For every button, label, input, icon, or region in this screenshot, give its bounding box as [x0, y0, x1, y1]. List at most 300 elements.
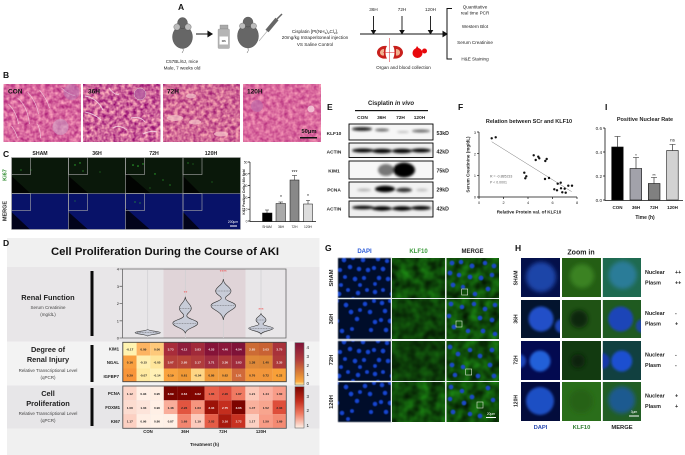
expression scores: Plasm [645, 404, 661, 410]
axis tick labels: 4 [117, 266, 120, 272]
heatmap: proliferation markers: 1.08 [127, 406, 133, 410]
heatmap: proliferation markers: 1.87 [236, 392, 242, 396]
regression line [492, 142, 572, 192]
heatmap column labels: 72H [219, 429, 227, 434]
row labels: 36H [329, 314, 335, 324]
expression scores: ++ [675, 270, 681, 276]
column headers: MERGE [461, 249, 484, 255]
row band: cell proliferation [7, 386, 320, 428]
heading: renal function [21, 293, 75, 317]
row labels: SHAM [329, 269, 335, 287]
heading: renal function: Renal Function [21, 293, 75, 302]
heatmap: renal injury markers: 4.54 [236, 348, 242, 352]
bar labels: 36H [278, 225, 285, 229]
bar labels [262, 225, 313, 229]
heatmap row labels: PCNA [108, 391, 120, 396]
chart tick labels: 0.2 [596, 174, 602, 179]
expression scores [645, 270, 681, 410]
heatmap: renal injury markers: 2.85 [249, 348, 255, 352]
blot: ACTIN [349, 143, 433, 158]
blot: KIM1 [349, 161, 433, 179]
heading: renal injury: Degree of [31, 345, 66, 354]
readout labels: H&E Staining [461, 56, 489, 62]
injection text: 20mg/kg Intraperitoneal injection [282, 35, 349, 40]
readout labels: Quantitative [463, 4, 488, 10]
expression scores: Nuclear [645, 352, 666, 358]
significance marks: * [635, 153, 637, 158]
scatter tick labels: 3 [474, 131, 476, 135]
row labels [514, 271, 520, 407]
scale bar 20 micrometre [486, 412, 496, 418]
icon: syringe [259, 14, 282, 41]
axis tick labels: 0 [117, 336, 120, 340]
scatter tick labels [474, 131, 578, 205]
heatmap: proliferation markers: 1.47 [249, 406, 255, 410]
heatmap: proliferation markers [123, 386, 286, 428]
violins [135, 279, 273, 336]
expression scores: - [675, 352, 677, 358]
axis tick labels: 2 [117, 301, 120, 306]
column headers: KLF10 [409, 249, 428, 255]
chart axes [603, 128, 683, 200]
chart tick labels: 0.6 [596, 126, 602, 131]
panel H: zoomed nuclei [512, 243, 681, 431]
heatmap: proliferation markers: 0.93 [140, 392, 147, 396]
icon: mouse [172, 18, 192, 53]
heatmap row labels: KIM1 [109, 346, 120, 352]
arrow: mouse to vial [196, 32, 212, 36]
heading: cell proliferation: Proliferation [26, 399, 70, 408]
bracket [447, 8, 452, 59]
heatmap: renal injury markers: -0.05 [153, 360, 161, 364]
heatmap: proliferation markers: 0.95 [154, 392, 160, 396]
scatter tick labels: 1 [474, 174, 476, 178]
heatmap: proliferation markers: 0.86 [154, 420, 160, 424]
heatmap: renal injury markers: 0.22 [276, 374, 283, 378]
bar chart tick labels: 50 [244, 160, 248, 164]
heatmap: proliferation markers: 2.26 [181, 406, 187, 410]
panel letter G: G [325, 243, 332, 253]
scatter tick labels: 2 [474, 152, 476, 156]
zoom boxes [456, 289, 483, 408]
label 36H: 36H [88, 88, 100, 96]
lane labels: 36H [377, 115, 386, 121]
heading: renal function: (mg/dL) [40, 312, 56, 317]
heatmap column labels: CON [143, 429, 153, 434]
panel F: correlation scatter [458, 102, 578, 214]
heatmap: proliferation markers: 2.03 [208, 420, 215, 424]
correlation statistics: R = -0.885233 [490, 174, 512, 178]
heatmap: renal injury markers: -0.14 [153, 374, 161, 378]
readout labels: real time PCR [461, 10, 490, 16]
scatter axis titles [466, 136, 562, 214]
timepoint labels [369, 7, 436, 12]
molecular weights: 42kD [436, 206, 449, 212]
scale bar 200 micrometre: 200μm [228, 220, 238, 224]
heatmap: renal injury markers: 3.73 [168, 348, 174, 352]
panel letter E: E [327, 102, 333, 112]
expression scores: - [675, 363, 677, 369]
heatmap column labels: 120H [256, 429, 266, 434]
heatmap: proliferation markers: 1.69 [181, 420, 187, 424]
heatmap: proliferation markers: 0.96 [140, 420, 147, 424]
heading: cell proliferation [19, 389, 77, 423]
violin plot: serum creatinine [117, 266, 286, 340]
colour scale: proliferation [295, 387, 310, 428]
label 72H: 72H [167, 88, 179, 96]
significance marks [280, 170, 309, 201]
scale bar 200 micrometre [228, 220, 238, 226]
heatmap: renal injury markers: 4.12 [181, 348, 187, 352]
heatmap row labels: KI67 [111, 419, 121, 424]
scatter title: Relation between SCr and KLF10 [486, 119, 572, 125]
panel B: H&E histology [3, 70, 321, 142]
heatmap: renal injury markers: 0.76 [249, 374, 255, 378]
row labels: 36H [514, 314, 520, 324]
chart tick labels: 0.4 [596, 150, 602, 155]
scatter axes [477, 132, 577, 199]
mouse strain caption: Male, 7 weeks old [164, 66, 201, 70]
colour scale: proliferation: 1 [306, 423, 310, 428]
scatter points [490, 136, 573, 194]
blot: PCNA [349, 182, 433, 198]
heatmap: proliferation markers: 2.33 [276, 406, 283, 410]
micrograph 72H [163, 84, 240, 142]
violin frame and axis [120, 269, 286, 338]
heading: renal injury: Renal Injury [27, 355, 70, 364]
scatter tick labels: 6 [551, 201, 554, 205]
significance marks [635, 138, 676, 178]
significance marks: * [280, 195, 282, 201]
bar labels [612, 205, 678, 210]
significance stars: ** [184, 290, 187, 295]
zoom heading: Zoom in [567, 250, 595, 256]
heading: renal injury: (qPCR) [40, 375, 56, 380]
heatmap: proliferation markers: 1.63 [195, 406, 201, 410]
expression scores: + [675, 394, 678, 400]
row labels: 72H [329, 355, 335, 365]
column headers: SHAM [32, 151, 48, 157]
expression scores: Nuclear [645, 394, 666, 400]
expression scores: Nuclear [645, 270, 666, 276]
row band: renal function [7, 267, 320, 342]
lane labels [357, 115, 426, 121]
heatmap: proliferation markers: 1.12 [127, 392, 133, 396]
correlation statistics: P < 0.0001 [490, 180, 507, 184]
readout labels: Serum Creatinine [457, 40, 493, 45]
axis title: Time (h) [635, 215, 655, 221]
axis tick labels [117, 266, 120, 340]
image gutters [338, 258, 499, 422]
heatmap: renal injury markers: 3.36 [222, 360, 228, 364]
DAPI micrographs [338, 258, 391, 422]
row labels: 120H [329, 395, 335, 409]
KLF10 micrographs [392, 258, 445, 422]
scatter axis titles: Relative Protein val. of KLF10 [497, 210, 562, 214]
scale bar 3 micrometre: 3μm [631, 410, 637, 414]
KLF10 staining [562, 258, 601, 421]
injection text [282, 29, 349, 47]
icon: blood [412, 46, 427, 58]
bar labels: 120H [667, 205, 678, 210]
colour scale: renal injury: 3 [306, 354, 310, 359]
timepoint labels: 72H [398, 7, 406, 12]
heatmap: proliferation markers: 2.75 [222, 406, 228, 410]
heading: cell proliferation: (qPCR) [40, 418, 56, 423]
heatmap: proliferation markers: 1.44 [263, 392, 269, 396]
expression scores: Nuclear [645, 311, 666, 317]
expression scores: ++ [675, 280, 681, 286]
injection text: 2 [328, 31, 330, 35]
heatmap: renal injury markers: 0.62 [222, 374, 228, 378]
DAPI nuclei [512, 258, 569, 421]
channel labels: DAPI [534, 425, 548, 431]
panel E: western blots [327, 101, 449, 217]
axis tick labels: 1 [117, 318, 120, 323]
significance marks: *** [292, 170, 297, 176]
heatmap: renal injury markers: -0.17 [126, 348, 134, 352]
blot: KLF10 [349, 124, 433, 140]
row labels: 72H [514, 355, 520, 365]
icon: cisplatin vial [218, 25, 230, 48]
injection text: VS Saline Control [297, 42, 333, 47]
scatter axis titles: Serum Creatinine (mg/dL) [466, 136, 470, 193]
column headers: 120H [205, 151, 217, 157]
heading rule [355, 110, 428, 111]
heatmap: proliferation markers: 0.87 [168, 420, 174, 424]
axis tick labels: 3 [117, 284, 120, 289]
heatmap: proliferation markers: 3.66 [236, 406, 242, 410]
heatmap: renal injury markers: 3.83 [195, 348, 201, 352]
panel G: KLF10 immunofluorescence [325, 243, 499, 422]
heatmap: renal injury markers: 3.17 [195, 360, 201, 364]
heatmap: renal injury markers: 0.19 [168, 374, 174, 378]
scatter tick labels: 0 [478, 201, 480, 205]
column headers [32, 151, 217, 157]
scatter tick labels: 2 [502, 201, 505, 205]
heatmap: proliferation markers: 1.17 [127, 420, 133, 424]
colour scale: renal injury: 1 [306, 372, 310, 377]
injection text: 3 [325, 31, 327, 35]
heatmap: proliferation markers: 1.59 [263, 420, 269, 424]
bar chart axis [248, 162, 316, 222]
bar chart axis title: Ki67 Positive Cells / 40x field [242, 169, 246, 215]
bar chart tick labels: 10 [244, 208, 248, 212]
significance marks: * [307, 194, 309, 200]
lane labels: 120H [414, 115, 426, 121]
protein labels: ACTIN [327, 150, 342, 156]
heatmap: renal injury markers: -0.04 [194, 374, 202, 378]
bar labels: 36H [632, 205, 640, 210]
micrograph CON [4, 84, 82, 142]
icon: kidneys [377, 38, 403, 62]
panel background [7, 238, 320, 455]
scale bar 3 micrometre [629, 410, 639, 416]
heatmap: proliferation markers: 3.34 [208, 406, 215, 410]
title: Cell Proliferation During the Course of AKI [51, 246, 279, 258]
bar labels: 72H [650, 205, 658, 210]
heatmap row labels: IGFBP7 [103, 374, 120, 379]
bar chart: Ki67 positive cells [242, 160, 316, 229]
heatmap row labels: FOXM1 [105, 405, 121, 410]
heading: cell proliferation: Relative Transcriptional Level [19, 411, 77, 416]
row label MERGE: MERGE [2, 201, 8, 221]
heatmap: proliferation markers: 1.52 [263, 406, 269, 410]
significance marks: ** [652, 173, 656, 178]
heatmap: renal injury markers: 0.29 [127, 374, 133, 378]
bar labels: CON [612, 205, 622, 210]
heatmap: proliferation markers: 3.62 [195, 392, 201, 396]
column headers: DAPI [357, 249, 372, 255]
heading: renal function: Serum Creatinine [30, 305, 66, 310]
x axis title: Treatment (h) [190, 442, 220, 447]
mouse strain caption [164, 59, 201, 70]
merged micrographs [446, 258, 499, 422]
blot heading: Cisplatin in vivo [368, 101, 414, 107]
panel letter H: H [515, 243, 521, 253]
readout labels [457, 4, 493, 62]
colour scale: proliferation: 2 [306, 408, 310, 413]
violin quartile lines [137, 291, 272, 333]
timepoint labels: 36H [369, 7, 378, 12]
icon: cisplatin vial: CIS [222, 41, 226, 43]
panel letter A: A [178, 2, 184, 12]
protein labels: PCNA [327, 188, 341, 194]
expression scores: + [675, 322, 678, 328]
lane labels: CON [357, 115, 368, 121]
heatmap: renal injury markers: 0.86 [208, 374, 215, 378]
heatmap: proliferation markers: 1.69 [276, 420, 283, 424]
molecular weights: 42kD [436, 150, 449, 156]
bar labels: SHAM [262, 225, 272, 229]
blot: ACTIN loading control [349, 201, 433, 217]
protein labels [327, 131, 342, 212]
row labels [329, 269, 335, 409]
panel letter D: D [3, 238, 9, 248]
protein labels: ACTIN [327, 206, 342, 212]
panel C: Ki67 immunofluorescence [2, 149, 316, 230]
scale bar 50 micrometre [300, 129, 317, 138]
timepoint labels: 120H [425, 7, 436, 12]
scale bar 20 micrometre: 20μm [487, 412, 495, 416]
heatmap: proliferation markers: 1.17 [249, 420, 255, 424]
scatter tick labels: 8 [576, 201, 578, 205]
merged nuclei [594, 258, 650, 421]
heatmap: renal injury markers: 3.35 [276, 360, 283, 364]
heatmap: renal injury markers: 3.83 [236, 360, 242, 364]
treatment shading [164, 269, 246, 338]
heatmap: proliferation markers: 3.64 [181, 392, 187, 396]
micrograph grid [12, 158, 240, 230]
heatmap: renal injury markers: 1.38 [249, 360, 255, 364]
panel letter C: C [3, 149, 9, 159]
heatmap: renal injury markers: 1.51 [236, 374, 242, 378]
bar chart tick labels [244, 160, 248, 224]
timeline arrow [360, 32, 447, 36]
bar chart tick labels: 20 [244, 196, 248, 200]
micrograph 36H [83, 84, 161, 142]
heatmap: renal injury markers: 4.40 [222, 348, 228, 352]
group center lines [148, 270, 261, 338]
heatmap: renal injury markers: 3.71 [208, 360, 215, 364]
heatmap: proliferation markers: 1.03 [140, 406, 147, 410]
column headers: 72H [149, 151, 159, 157]
heatmap column labels: 36H [181, 429, 189, 434]
micrograph 120H [243, 84, 321, 142]
heatmap: renal injury markers: 3.03 [263, 348, 269, 352]
injection text: ], [336, 29, 338, 34]
bar chart tick labels: 30 [244, 184, 248, 188]
significance stars [184, 269, 264, 312]
row band: renal injury [7, 342, 320, 386]
expression scores: Plasm [645, 322, 661, 328]
colour scale: renal injury: 0 [306, 381, 310, 386]
heatmap: renal injury markers: 0.61 [181, 374, 187, 378]
injection text: Cisplatin [Pt(NH [292, 29, 325, 34]
heading: renal injury: Relative Transcriptional Level [19, 368, 77, 373]
bars [262, 176, 312, 222]
heatmap: renal injury markers: 0.06 [154, 348, 160, 352]
heatmap: proliferation markers: 0.90 [154, 406, 160, 410]
injection text: ) [326, 29, 328, 34]
panel I: positive nuclear rate [596, 102, 683, 221]
heatmap: proliferation markers: 1.19 [195, 420, 201, 424]
timepoint arrows [372, 16, 432, 34]
colour scale: renal injury [295, 343, 310, 386]
row labels: SHAM [514, 271, 520, 285]
correlation statistics [490, 174, 512, 184]
separator bars [90, 271, 94, 426]
bars [612, 147, 678, 200]
channel labels [534, 425, 633, 431]
bar chart tick labels: 40 [244, 172, 248, 176]
colour scale: proliferation: 3 [306, 394, 310, 399]
colour scale: renal injury: 4 [306, 345, 310, 350]
channel labels: KLF10 [573, 425, 590, 431]
injection text: Cl [329, 29, 334, 34]
row label Ki67: Ki67 [2, 169, 8, 181]
row labels: 120H [514, 395, 520, 407]
panel letter F: F [458, 102, 463, 112]
molecular weights: 75kD [436, 168, 449, 174]
readout labels: Western Blot [462, 24, 489, 29]
heatmap: proliferation markers: 2.26 [222, 392, 228, 396]
mouse strain caption: C57BL/6J, mice [166, 59, 199, 64]
protein labels: KLF10 [327, 131, 342, 137]
heatmap: renal injury markers: 0.16 [127, 360, 133, 364]
heatmap: renal injury markers: 3.07 [168, 360, 174, 364]
colour scale: renal injury: 2 [306, 363, 310, 368]
heatmap: renal injury markers: 4.53 [208, 348, 215, 352]
column headers [357, 249, 484, 255]
collection caption: Organ and blood collection [376, 65, 431, 70]
heatmap: renal injury markers: -0.07 [140, 374, 147, 378]
heatmap: renal injury markers: 3.75 [276, 348, 283, 352]
chart title: Positive Nuclear Rate [617, 117, 673, 123]
panel A: experimental design [164, 2, 493, 70]
channel labels: MERGE [611, 425, 633, 431]
panel letter I: I [605, 102, 607, 112]
significance marks: ns [670, 138, 676, 142]
label CON: CON [8, 88, 23, 96]
heatmap: proliferation markers: 1.60 [276, 392, 283, 396]
label 120H: 120H [247, 88, 263, 96]
panel D: cell proliferation summary [3, 238, 320, 455]
significance stars: **** [220, 269, 227, 274]
expression scores: Plasm [645, 280, 661, 286]
significance stars: *** [258, 307, 264, 312]
molecular weights [436, 131, 449, 212]
